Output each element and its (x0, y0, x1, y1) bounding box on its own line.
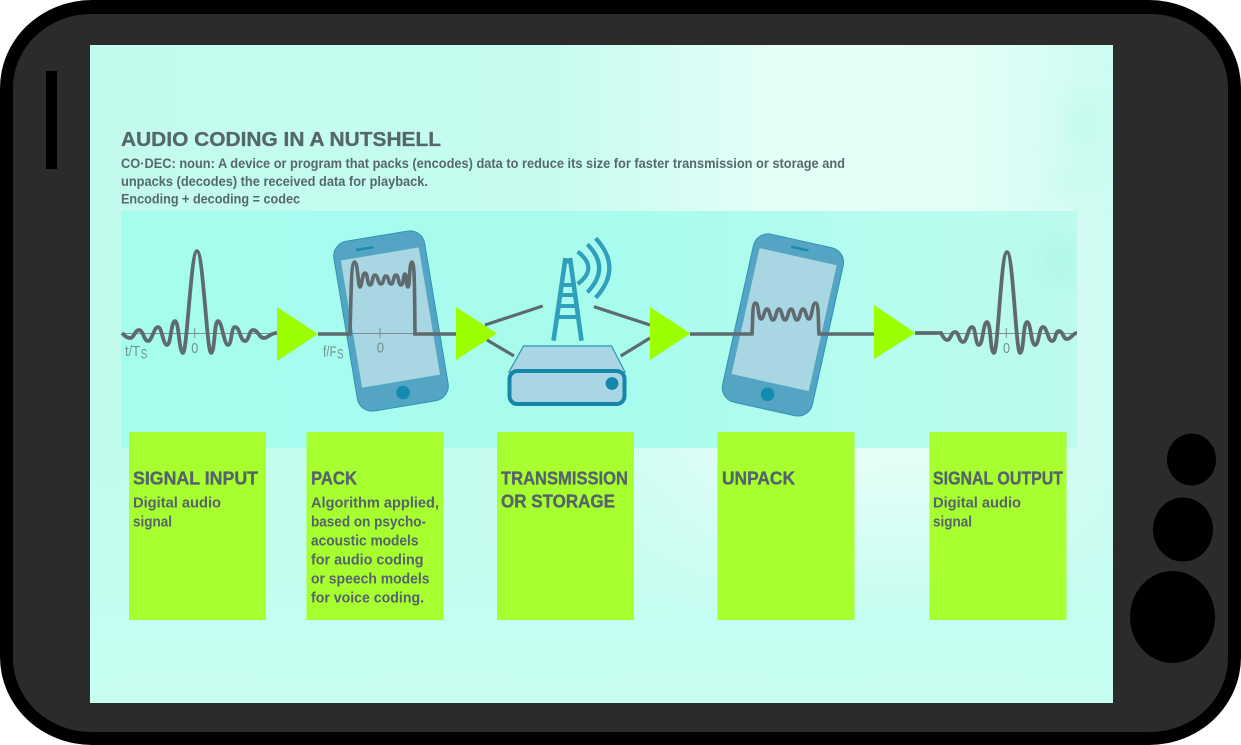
panel: pack: for audio coding (311, 552, 424, 568)
waveform: packed signal: f/F (323, 344, 337, 360)
panel: pack (306, 432, 444, 620)
waveform: signal input: 0 (191, 340, 198, 357)
panel: pack: for voice coding. (311, 590, 424, 606)
diagram band (121, 211, 1077, 448)
panel: signal output: SIGNAL OUTPUT (933, 468, 1064, 488)
waveform: packed signal: S (337, 346, 344, 362)
panel: signal input: Digital audio (133, 494, 221, 512)
transmission links (485, 306, 650, 356)
panel: signal output (930, 432, 1066, 620)
waveform: signal output (915, 252, 1077, 357)
title: AUDIO CODING IN A NUTSHELL (121, 129, 441, 151)
icon: radio tower (554, 238, 609, 341)
screen background (90, 45, 1113, 703)
arrow 1 (277, 307, 318, 361)
panel: pack: Algorithm applied, (311, 494, 439, 512)
phone buttons (1130, 434, 1216, 663)
panel: unpack: UNPACK (722, 468, 796, 488)
waveform: unpacked signal (690, 303, 875, 334)
panel: signal output: signal (933, 514, 972, 530)
panel: signal output: Digital audio (933, 494, 1021, 512)
panel: unpack (718, 432, 854, 620)
arrow 4 (874, 305, 916, 359)
waveform: signal output: 0 (1003, 340, 1010, 357)
panel: signal input (129, 432, 266, 620)
panel: pack: acoustic models (311, 532, 418, 550)
panel: signal input: signal (133, 514, 172, 530)
waveform: signal input: S (141, 346, 147, 362)
icon: storage box (509, 346, 625, 404)
phone icon: unpack (719, 231, 846, 419)
arrow 3 (650, 307, 690, 360)
definition text: Encoding + decoding = codec (121, 192, 300, 206)
phone icon: pack (331, 229, 451, 413)
arrow 2 (456, 307, 497, 360)
panel: transmission or storage: TRANSMISSION (501, 468, 628, 488)
waveform: packed signal: 0 (377, 340, 384, 357)
panel: signal input: SIGNAL INPUT (133, 468, 259, 488)
panel: pack: PACK (311, 468, 358, 488)
waveform: signal input: t/T (125, 343, 140, 360)
definition text (121, 156, 845, 206)
panel: transmission or storage: OR STORAGE (501, 490, 615, 512)
waveform: signal input (122, 251, 277, 362)
definition text: unpacks (decodes) the received data for playback. (121, 174, 428, 189)
definition text: CO·DEC: noun: A device or program that packs (encodes) data to reduce its size for faster transmission or storage and (121, 156, 845, 171)
panel: pack: or speech models (311, 570, 430, 588)
panel: transmission or storage (497, 432, 634, 620)
waveform: packed signal (318, 262, 456, 362)
speaker slot (46, 71, 57, 169)
panel: pack: based on psycho- (311, 514, 426, 530)
